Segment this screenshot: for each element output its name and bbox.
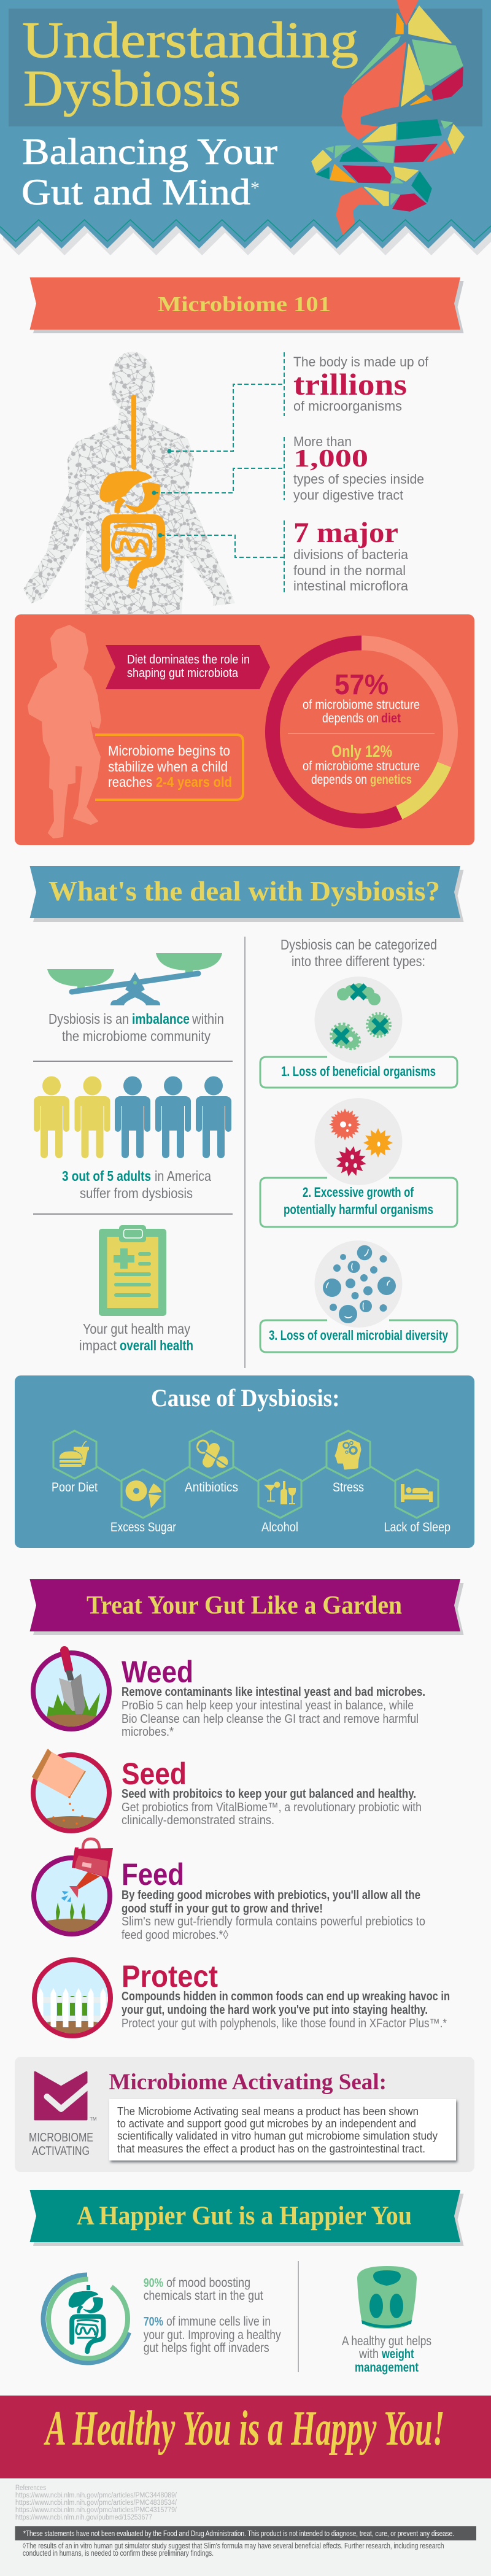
banner: A Happier Gut is a Happier You [29, 2190, 464, 2246]
stat text: mood and immune: your gut. Improving a healthy [144, 2328, 281, 2342]
banner: Microbiome 101: Microbiome 101 [158, 292, 331, 316]
text: weight management [342, 2334, 431, 2375]
text block: trillions: trillions [293, 367, 407, 401]
banner: Treat Your Gut Like a Garden [29, 1579, 464, 1635]
banner: Treat Your Gut Like a Garden: Treat Your Gut Like a Garden [87, 1592, 402, 1620]
step: weed [25, 1650, 425, 1741]
stat: 12% genetics [303, 742, 420, 787]
text: weight management: weight [381, 2347, 414, 2361]
text block: 1,000 species: your digestive tract [293, 487, 403, 503]
label: Stress [333, 1480, 364, 1495]
icon: child silhouette [28, 625, 101, 838]
step: feed: Slim's new gut-friendly formula contains powerful prebiotics to [122, 1915, 425, 1928]
icon: pills [198, 1441, 228, 1468]
text: imbalance: within [191, 1011, 224, 1027]
label: Lack of Sleep [384, 1520, 450, 1534]
text: weight management: A healthy gut helps [342, 2334, 431, 2348]
panel: cause of dysbiosis [15, 1375, 474, 1548]
text block: 7 major [293, 517, 409, 594]
callout: diet dominates: Diet dominates the role in [127, 653, 250, 667]
chart: donut 57% diet, 12% genetics [273, 643, 450, 821]
stat text: mood and immune: 70% [144, 2315, 163, 2329]
label: Antibiotics [185, 1480, 238, 1495]
text block: 7 major: intestinal microflora [293, 578, 409, 594]
icon: clipboard [99, 1225, 166, 1316]
text: 3 out of 5 adults: suffer from dysbiosis [80, 1185, 193, 1201]
subtitle: Gut and Mind [21, 172, 250, 212]
references: References [15, 2485, 46, 2492]
icon: cocktail, bottle, wine [264, 1481, 296, 1504]
subtitle: * [250, 178, 260, 198]
icon: picket fence [32, 1957, 113, 2038]
stat text: mood and immune: gut helps fight off invaders [144, 2341, 269, 2355]
step: protect [32, 1957, 449, 2038]
text block: 1,000 species: types of species inside [293, 471, 424, 487]
icon: watering can and sprouts [31, 1838, 113, 1936]
stat: 12% genetics: genetics [370, 773, 412, 787]
icon: digestive organs [100, 395, 161, 584]
text: imbalance [48, 1011, 224, 1044]
banner: A Happier Gut is a Happier You: A Happier Gut is a Happier You [77, 2202, 412, 2230]
text: overall health [79, 1321, 193, 1353]
step: protect: Protect [122, 1959, 218, 1994]
stat text: mood and immune: 90% [144, 2276, 163, 2290]
references [15, 2485, 177, 2521]
step: seed: Seed with probitoics to keep your gut balanced and healthy. [122, 1787, 416, 1801]
icon: sparse bubbles [323, 1245, 396, 1323]
text: overall health: impact [79, 1337, 117, 1353]
text: three types intro: Dysbiosis can be categorized [280, 937, 437, 953]
step: weed: microbes.* [122, 1725, 174, 1739]
icon: donut and ice cream [125, 1480, 161, 1508]
type 2: excessive growth: potentially harmful organisms [284, 1202, 433, 1217]
icon: harmful microbes [327, 1107, 393, 1179]
callout: stabilize age: reaches [108, 774, 152, 790]
text: 3 out of 5 adults: in America [155, 1168, 211, 1184]
text card: scientifically validated in vitro human gut microbiome simulation study [117, 2130, 438, 2142]
step: seed: Get probiotics from VitalBiome™, a revolutionary probiotic with [122, 1801, 422, 1814]
banner: Microbiome 101 [29, 277, 464, 333]
step: protect: Protect your gut with polyphenols, like those found in XFactor Plus™.* [122, 2017, 447, 2030]
subtitle: Balancing Your [22, 131, 277, 172]
icon: seal logo: ACTIVATING [32, 2145, 90, 2158]
text: imbalance: the microbiome community [62, 1028, 211, 1044]
chart: gut ring 90% and 70% [44, 2275, 129, 2363]
step: feed [26, 1839, 425, 1946]
text block: 1,000 species: More than [293, 434, 352, 449]
disclaimer bar [15, 2526, 476, 2540]
step: weed: Bio Cleanse can help cleanse the GI tract and remove harmful [122, 1712, 419, 1726]
type 3: loss of diversity [260, 1240, 457, 1352]
references: https://www.ncbi.nlm.nih.gov/pmc/articles/PMC4315779/ [15, 2507, 177, 2514]
text block: 7 major: 7 major [293, 517, 398, 549]
text block: 7 major: found in the normal [293, 563, 406, 578]
stat text: mood and immune [144, 2276, 281, 2355]
callout: diet dominates: shaping gut microbiota [127, 667, 239, 680]
icon: teal digestive organs [69, 2285, 103, 2351]
label: Poor Diet [52, 1480, 98, 1495]
panel: diet and genetics [15, 614, 474, 845]
label: Alcohol [261, 1520, 298, 1534]
panel: microbiome activating seal [15, 2057, 474, 2172]
text block: 1,000 species: 1,000 [293, 444, 368, 472]
stat: 57% diet [303, 668, 420, 725]
step: feed: By feeding good microbes with prebiotics, you'll allow all the [122, 1889, 420, 1902]
step: weed: Weed [122, 1655, 193, 1689]
icon: burger and drink [59, 1441, 89, 1467]
text: three types intro [280, 937, 437, 969]
banner: What's the deal with Dysbiosis?: What's the deal with Dysbiosis? [48, 875, 440, 907]
connectors: dashed leader lines [152, 352, 284, 594]
stat text: mood and immune: chemicals start in the gut [144, 2289, 263, 2303]
step: feed: good stuff in your gut to grow and thrive! [122, 1902, 323, 1916]
study note: conducted in humans, is needed to confirm these preliminary findings. [23, 2548, 214, 2558]
header panel [0, 0, 491, 255]
heading: Cause of Dysbiosis: [151, 1384, 340, 1412]
type 1: loss of beneficial organisms [260, 977, 457, 1088]
icon: stained-glass intestine [312, 0, 464, 234]
text: weight management: with [358, 2347, 379, 2361]
text block: trillions: The body is made up of [293, 354, 429, 369]
text: 3 out of 5 adults: 3 out of 5 adults [62, 1168, 151, 1184]
text: weight management: management [355, 2361, 419, 2375]
text: overall health: overall health [120, 1337, 193, 1353]
callout: stabilize age: 2-4 years old [156, 774, 232, 790]
stat text: mood and immune: of mood boosting [166, 2276, 250, 2290]
step: protect: your gut, undoing the hard work you've put into staying healthy. [122, 2003, 428, 2017]
icon: weight scale [357, 2266, 417, 2329]
text: 3 out of 5 adults [62, 1168, 211, 1201]
text: three types intro: into three different types: [292, 953, 425, 969]
icon: bed [401, 1484, 433, 1502]
label: Excess Sugar [110, 1520, 176, 1534]
banner: What's the deal with Dysbiosis? [29, 866, 464, 922]
callout: diet dominates [106, 645, 270, 689]
type 2: excessive growth: 2. Excessive growth of [303, 1185, 414, 1200]
text: overall health: Your gut health may [83, 1321, 190, 1337]
text card: that measures the effect a product has on the gastrointestinal tract. [117, 2143, 425, 2155]
stat: 57% diet: 57% [334, 668, 389, 700]
figure: body network with digestive organs [23, 352, 235, 614]
callout: stabilize age [95, 735, 243, 800]
stat: 12% genetics: depends on [311, 773, 367, 787]
text block: trillions: of microorganisms [293, 398, 402, 414]
step: weed: Remove contaminants like intestinal yeast and bad microbes. [122, 1685, 425, 1699]
icon: seal logo: MICROBIOME [29, 2131, 93, 2145]
title [22, 12, 358, 117]
subtitle [21, 131, 277, 212]
step: feed: Feed [122, 1857, 184, 1892]
stat: 12% genetics: Only 12% [331, 742, 392, 760]
text card [109, 2099, 456, 2160]
references: https://www.ncbi.nlm.nih.gov/pubmed/15253677 [15, 2514, 152, 2521]
step: seed: Seed [122, 1757, 187, 1791]
text card: The Microbiome Activating seal means a product has been shown [117, 2105, 419, 2118]
study note [23, 2541, 444, 2558]
stat text: mood and immune: of immune cells live in [166, 2315, 271, 2329]
footer area [0, 2478, 491, 2576]
stat: 57% diet: diet [381, 711, 401, 725]
callout: stabilize age: Microbiome begins to [108, 743, 230, 759]
title: Understanding [22, 12, 358, 69]
type 1: loss of beneficial organisms: 1. Loss of beneficial organisms [281, 1064, 436, 1079]
references: https://www.ncbi.nlm.nih.gov/pmc/articles/PMC3448089/ [15, 2492, 177, 2499]
footer banner: A Healthy You is a Happy You! [0, 2396, 491, 2478]
icon: five people, three yellow [34, 1077, 231, 1158]
type 2: excessive growth [260, 1098, 457, 1227]
stat: 12% genetics: of microbiome structure [303, 759, 420, 773]
step: feed: feed good microbes.*◊ [122, 1928, 228, 1942]
text: imbalance: imbalance [132, 1011, 190, 1027]
title: Dysbiosis [23, 60, 241, 117]
stat: 57% diet: of microbiome structure [303, 698, 420, 712]
icon: beneficial microbes crossed out [331, 983, 390, 1050]
stat: 57% diet: depends on [322, 711, 379, 725]
icon: seal logo [29, 2072, 97, 2158]
references: https://www.ncbi.nlm.nih.gov/pmc/articles/PMC4838534/ [15, 2499, 177, 2507]
step: seed [31, 1749, 421, 1833]
icon: tilted balance scale [47, 953, 222, 1005]
heading: Microbiome Activating Seal: [109, 2070, 387, 2095]
icon: shovel in grass [31, 1646, 112, 1731]
text block: 7 major: divisions of bacteria [293, 547, 409, 562]
step: seed: clinically-demonstrated strains. [122, 1814, 274, 1827]
text card: to activate and support good gut microbes by an independent and [117, 2118, 416, 2130]
icon: seed packet [31, 1749, 112, 1833]
step: weed: ProBio 5 can help keep your intestinal yeast in balance, while [122, 1699, 414, 1712]
text block: 1,000 species [293, 434, 424, 503]
text: imbalance: Dysbiosis is an [48, 1011, 129, 1027]
text block: trillions [293, 354, 429, 414]
icon: seal logo: TM [90, 2116, 97, 2122]
icon: head with gears [336, 1440, 360, 1469]
callout: stabilize age: stabilize when a child [108, 759, 228, 775]
hexagon chain [53, 1431, 438, 1518]
